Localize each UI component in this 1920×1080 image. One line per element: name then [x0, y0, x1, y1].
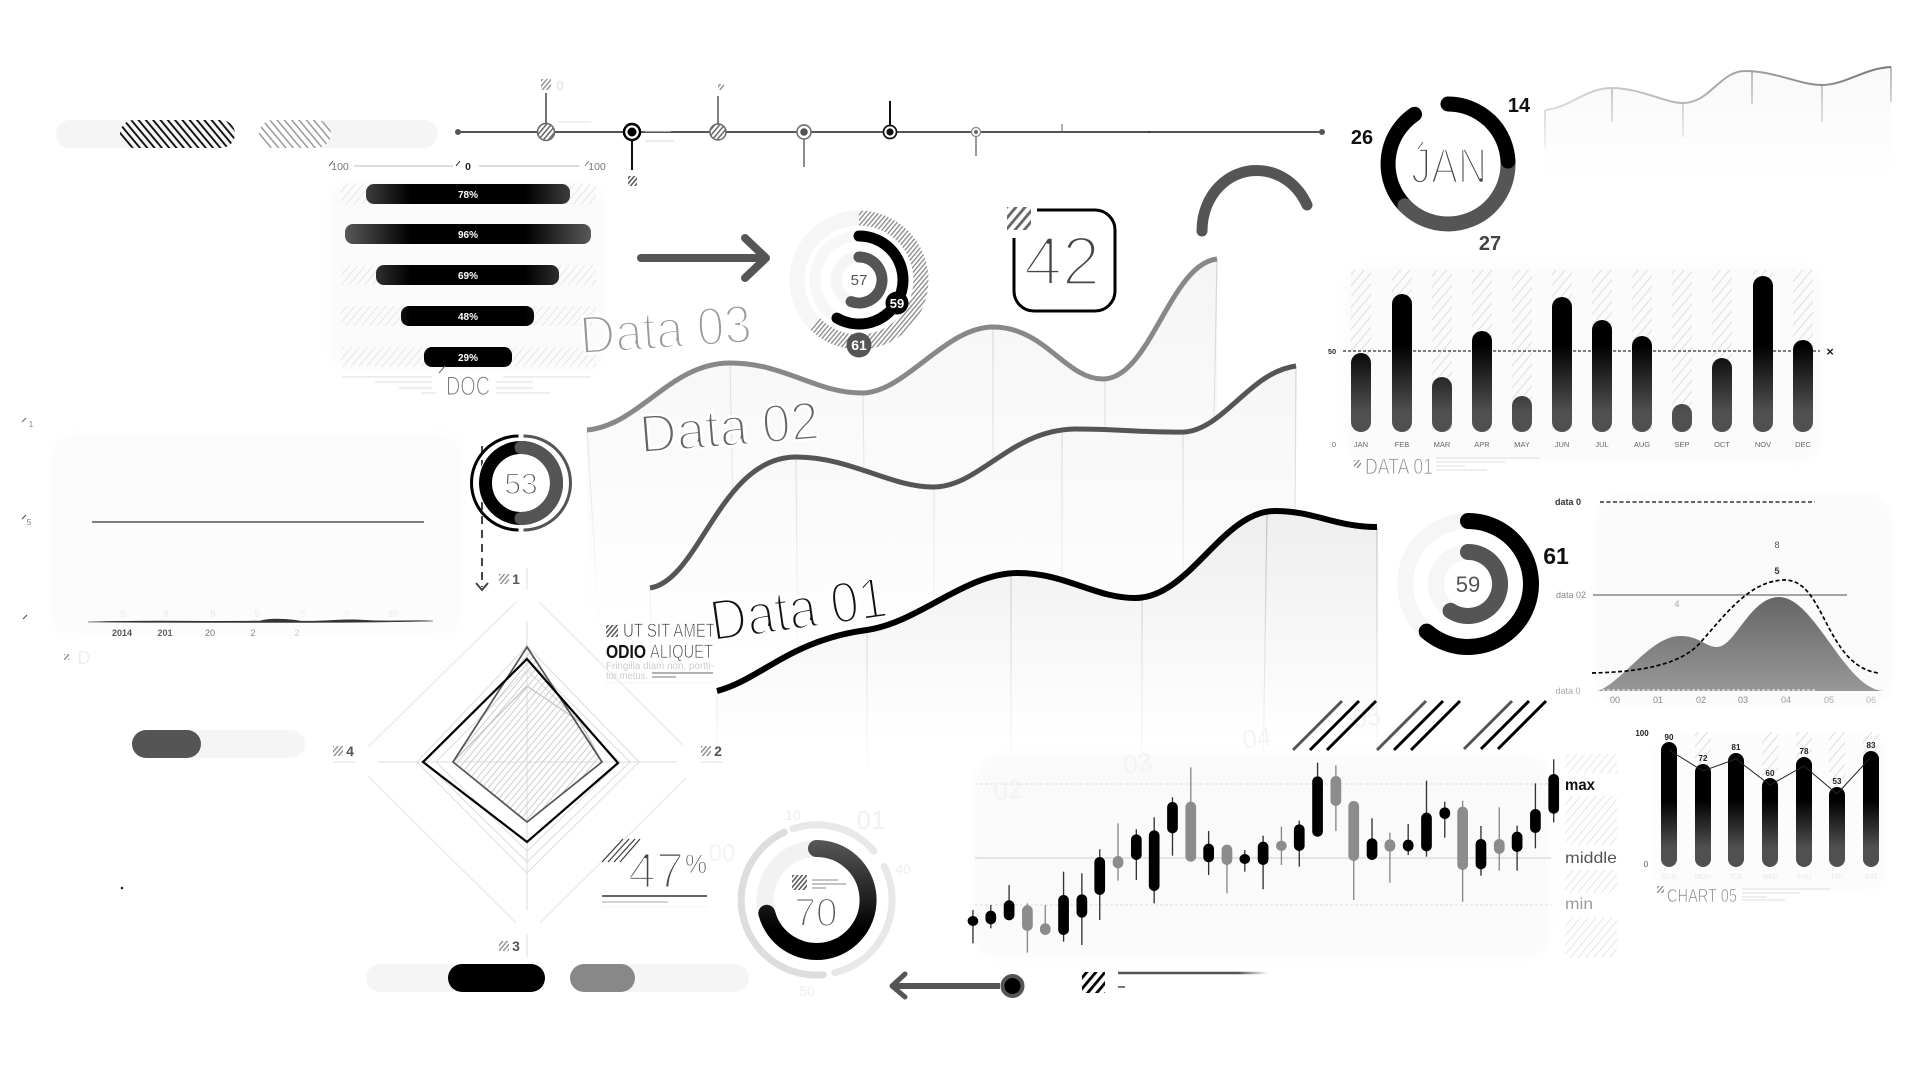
axis labels: JUN	[1555, 440, 1569, 449]
panel: candlestick chart: 03	[1121, 746, 1154, 780]
donut: 70: 01	[857, 805, 885, 835]
text block: UT SIT AMET: UT SIT AMET	[623, 621, 715, 642]
slider: grey pill	[570, 964, 749, 992]
panel: left faded line chart: 1	[29, 420, 34, 429]
area chart labels: 02	[1696, 695, 1706, 705]
chart labels: 53	[1833, 777, 1842, 786]
area chart labels: data 02	[1556, 590, 1586, 600]
radar axis labels	[333, 568, 723, 957]
donut: JAN: 26	[1351, 127, 1373, 149]
donut: 59 / 61	[1405, 521, 1569, 647]
donut: 53: 53	[504, 468, 538, 501]
chart: Data 03 curve	[587, 259, 1217, 640]
axis labels: MAR	[1434, 440, 1451, 449]
chart: faded top right line	[1545, 67, 1891, 180]
bar: 96%: 96%	[458, 230, 478, 241]
hatch blocks and scale labels: min	[1565, 896, 1593, 913]
label: DOC with lines	[342, 366, 591, 401]
donut: 59 / 61: 59	[1456, 572, 1480, 597]
text block: UT SIT AMET: Fringilla diam non, portti-	[606, 661, 714, 672]
axis labels: JAN	[1354, 440, 1368, 449]
chart labels: 81	[1732, 743, 1741, 752]
chart: timeline with nodes: 0	[556, 78, 564, 93]
panel: left faded line chart: 8	[344, 609, 350, 619]
donut: 70: 70	[794, 891, 838, 935]
donut: 59 / 61: 61	[1543, 543, 1569, 569]
label: Data 02: Data 02	[637, 391, 821, 465]
panel: monthly bar chart DATA 01: ×	[1826, 344, 1834, 359]
axis labels	[1328, 347, 1811, 449]
scale: minus 100 to 100: 0	[465, 161, 471, 173]
axis labels: 0	[1332, 440, 1336, 449]
caption CHART 05: CHART 05	[1667, 886, 1737, 906]
donut: JAN: 14	[1508, 95, 1531, 117]
panel: left faded line chart: 2	[294, 628, 300, 638]
area chart labels: 04	[1781, 695, 1791, 705]
panel: left faded line chart: 5	[254, 609, 260, 619]
donut: JAN: JAN	[1411, 138, 1487, 194]
label: DOC with lines: DOC	[446, 371, 490, 401]
axis labels: SEP	[1674, 440, 1690, 449]
stat: 47%: 47	[628, 843, 684, 899]
chart labels: 83	[1867, 741, 1876, 750]
area chart labels: 8	[1774, 540, 1780, 550]
chart: timeline with nodes	[455, 78, 1325, 186]
panel: left faded line chart	[22, 418, 463, 889]
panel: candlestick chart: 02	[991, 773, 1024, 807]
panel: monthly bar chart DATA 01	[1328, 265, 1834, 479]
area chart labels: 06	[1866, 695, 1876, 705]
panel: left faded line chart: 20	[205, 628, 215, 638]
scale: minus 100 to 100	[329, 161, 606, 173]
donut: 57 / 59 / 61: 59	[890, 296, 904, 311]
decoration: triple slash groups	[1293, 701, 1546, 750]
stat: 47%: %	[685, 849, 707, 879]
chart labels: 0	[1644, 860, 1649, 869]
slider: black pill	[366, 964, 545, 992]
donut: 57 / 59 / 61	[797, 218, 921, 358]
donut: 70: 40	[895, 861, 911, 877]
axis labels: AUG	[1634, 440, 1650, 449]
panel: bar chart CHART 05	[1635, 729, 1887, 906]
panel: left faded line chart: 201	[157, 628, 173, 638]
card: number 42	[1007, 207, 1115, 311]
scale: minus 100 to 100: 100	[588, 161, 606, 173]
area chart labels: 01	[1653, 695, 1663, 705]
panel: bar chart CHART 05: TUE	[1729, 874, 1743, 881]
area chart labels: 05	[1824, 695, 1834, 705]
bar: 48%: 48%	[458, 312, 478, 323]
area chart labels: data 0	[1555, 497, 1581, 507]
panel: bar chart CHART 05: SUN	[1662, 874, 1676, 881]
stat: 47%: 00	[709, 840, 735, 867]
panel: left faded line chart: 8	[210, 609, 216, 619]
panel: candlestick chart	[968, 700, 1617, 958]
bar: 29%	[424, 347, 512, 367]
text block: UT SIT AMET	[606, 621, 715, 683]
hatch blocks and scale labels	[1565, 754, 1617, 958]
radar axis labels: 3	[512, 938, 520, 954]
bar: 48%	[401, 306, 534, 326]
axis labels: OCT	[1714, 440, 1730, 449]
bar: 69%: 69%	[458, 271, 478, 282]
caption DATA 01	[1354, 454, 1540, 479]
axis labels: APR	[1474, 440, 1490, 449]
bar: 96%	[345, 224, 591, 244]
dashed arrow down	[476, 446, 488, 590]
panel: candlestick chart: 04	[1240, 721, 1273, 755]
arrow: pointing right	[641, 238, 766, 278]
slider: dark pill	[132, 730, 305, 758]
donut: JAN	[1351, 95, 1531, 255]
panel: left faded line chart: 10	[388, 609, 398, 619]
panel: left faded line chart: 2014	[112, 628, 132, 638]
text block: UT SIT AMET: ODIO	[606, 642, 646, 662]
axis labels: NOV	[1755, 440, 1771, 449]
gauge arc	[1202, 170, 1307, 231]
axis labels: DEC	[1795, 440, 1811, 449]
card: number 42: 42	[1024, 222, 1100, 300]
chart labels: 60	[1766, 769, 1775, 778]
bar: 78%: 78%	[458, 190, 478, 201]
axis labels: 50	[1328, 347, 1336, 356]
chart labels: 100	[1635, 729, 1649, 738]
candlesticks	[968, 759, 1559, 953]
panel: left faded line chart: 5	[300, 609, 306, 619]
panel: area chart	[1555, 495, 1891, 705]
panel: left faded line chart: 5	[27, 518, 32, 527]
axis labels: JUL	[1595, 440, 1609, 449]
legend: hatch and line	[1082, 972, 1268, 993]
weekly bars	[1661, 742, 1879, 867]
text block: UT SIT AMET: ALIQUET	[650, 642, 713, 663]
label: Data 01: Data 01	[706, 565, 891, 654]
area chart labels: 4	[1674, 599, 1680, 609]
bar: 29%: 29%	[458, 353, 478, 364]
stat: 47%	[602, 839, 735, 907]
radar axis labels: 1	[512, 571, 520, 587]
radar chart	[333, 568, 723, 957]
caption DATA 01: DATA 01	[1365, 454, 1433, 479]
area chart labels: 03	[1738, 695, 1748, 705]
chart labels: 90	[1665, 733, 1674, 742]
panel: bar chart CHART 05: SAT	[1864, 874, 1878, 881]
hatch blocks and scale labels: middle	[1565, 850, 1617, 867]
chart labels: 78	[1800, 747, 1809, 756]
panel: candlestick chart: 05	[1350, 700, 1383, 734]
area chart labels	[1555, 497, 1876, 705]
scale: minus 100 to 100: 100	[331, 161, 349, 173]
axis labels: FEB	[1395, 440, 1409, 449]
panel: bar chart CHART 05: FRI	[1831, 874, 1843, 881]
bar: 69%	[376, 265, 559, 285]
chart labels	[1635, 729, 1876, 869]
panel: left faded line chart: 9	[163, 609, 169, 619]
chart: Data 02 curve	[650, 366, 1296, 680]
hatch blocks and scale labels: max	[1565, 777, 1595, 794]
radar axis labels: 2	[714, 743, 722, 759]
area chart labels: 00	[1610, 695, 1620, 705]
panel: bar chart CHART 05: THU	[1797, 874, 1811, 881]
panel: funnel bar chart	[329, 183, 606, 370]
radar axis labels: 4	[346, 743, 354, 759]
donut: 57 / 59 / 61: 57	[851, 272, 867, 289]
donut: 53	[472, 436, 570, 590]
panel: left faded line chart: 2	[250, 628, 256, 638]
arrow: pointing left with node	[892, 974, 1022, 997]
donut: 57 / 59 / 61: 61	[851, 337, 867, 353]
panel: bar chart CHART 05: MON	[1695, 874, 1711, 881]
label: Data 03: Data 03	[578, 294, 753, 366]
donut: 70	[741, 805, 911, 999]
axis labels: MAY	[1514, 440, 1530, 449]
donut: 70: 10	[785, 807, 801, 823]
panel: top hatched progress pills	[56, 120, 438, 148]
area chart labels: 5	[1774, 566, 1780, 576]
text block: UT SIT AMET: tor metus.	[606, 671, 648, 682]
panel: left faded line chart: D	[78, 648, 90, 668]
caption CHART 05	[1657, 886, 1830, 906]
monthly bars	[1351, 276, 1813, 432]
area chart labels: data 0	[1555, 686, 1581, 696]
bar: 78%	[366, 184, 570, 204]
panel: left faded line chart: 5	[120, 609, 126, 619]
chart: Data 01 curve	[717, 511, 1377, 780]
donut: JAN: 27	[1479, 233, 1501, 255]
donut: 70: 50	[799, 983, 815, 999]
panel: bar chart CHART 05: WED	[1762, 874, 1778, 881]
chart labels: 72	[1699, 754, 1708, 763]
